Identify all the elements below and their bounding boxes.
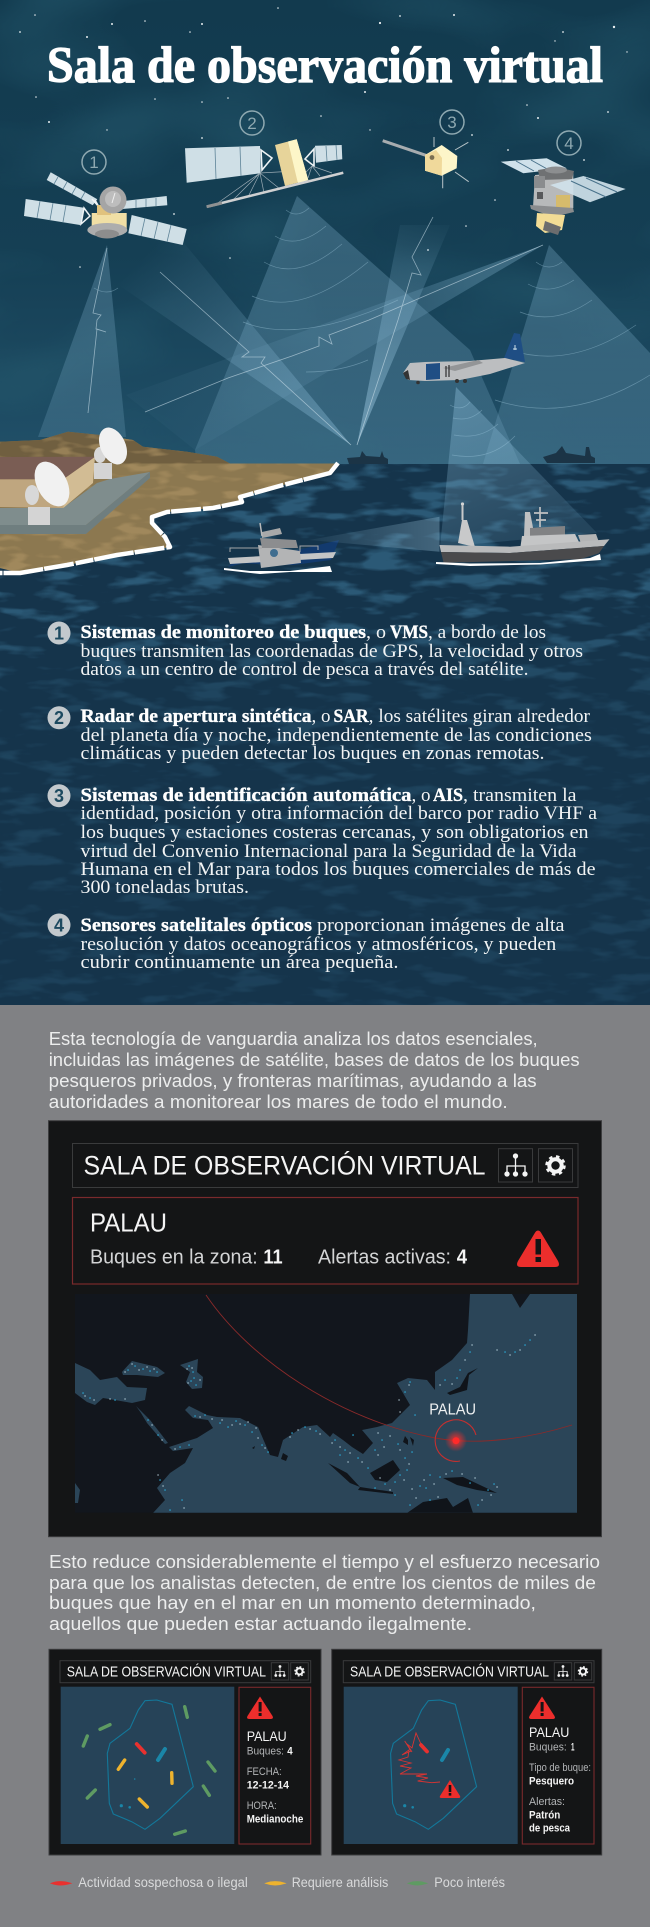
beam: satellite 1 to dish (38, 245, 126, 437)
land (0, 430, 340, 575)
intro paragraph: incluidas las imágenes de satélite, bases de datos de los buques (49, 1049, 580, 1070)
item 3: AIS: virtud del Convenio Internacional para la Seguridad de la Vida (80, 841, 577, 862)
item 1: VMS: VMS (390, 622, 428, 643)
suspicious vessel (421, 1745, 427, 1752)
second paragraph (49, 1551, 600, 1634)
signal beams (38, 196, 650, 464)
item 2: SAR: Radar de apertura sintética (80, 706, 312, 727)
item 4: optical sensors: resolución y datos oceanográficos y atmosféricos, y pueden (80, 934, 557, 955)
small title bar: SALA DE OBSERVACIÓN VIRTUAL (67, 1664, 266, 1681)
item 1: VMS: , o (366, 622, 386, 643)
item 2: SAR: SAR (334, 706, 369, 727)
item 3: AIS: identidad, posición y otra información del barco por radio VHF a (80, 803, 598, 824)
small title bar: SALA DE OBSERVACIÓN VIRTUAL (350, 1664, 549, 1681)
side info box: FECHA: (247, 1766, 282, 1778)
item 1: VMS (48, 622, 583, 680)
satellite 4 (501, 158, 626, 235)
Palau summary box: Alertas activas: (318, 1246, 451, 1268)
icon: warning triangle (517, 1230, 559, 1267)
vessel dots (83, 1340, 530, 1510)
item 2: SAR: climáticas y pueden detectar los buques en zonas remotas. (80, 743, 544, 764)
Palau marker (435, 1420, 476, 1461)
stars (19, 7, 628, 268)
fishing vessel (436, 502, 610, 566)
dashboard title bar: SALA DE OBSERVACIÓN VIRTUAL (84, 1149, 486, 1180)
side info box: PALAU (529, 1724, 569, 1740)
item 4: optical sensors (48, 914, 565, 973)
beam: satellite 2 (195, 196, 520, 464)
side info box: PALAU (247, 1728, 287, 1744)
number badges: 2 (247, 114, 257, 133)
ground station (0, 423, 150, 534)
icon: gear (546, 1156, 564, 1174)
item 1: VMS: 1 (54, 624, 64, 644)
dish front (27, 456, 77, 512)
second paragraph: Esto reduce considerablemente el tiempo y el esfuerzo necesario (49, 1551, 600, 1572)
patrol boat (224, 523, 339, 574)
satellite 2 (185, 139, 343, 207)
surveillance beam boat to ship (309, 517, 440, 552)
side info box: Tipo de buque: (529, 1762, 591, 1774)
untracked vessel (158, 1749, 165, 1760)
second paragraph: para que los analistas detecten, de entre los cientos de miles de (49, 1572, 596, 1593)
intro paragraph (49, 1028, 580, 1112)
aircraft (403, 333, 525, 384)
item 3: AIS: 3 (54, 786, 64, 806)
shoreline foam (0, 463, 338, 573)
Palau summary box: 4 (457, 1246, 468, 1268)
item 4: optical sensors: 4 (54, 916, 64, 936)
item 3: AIS: , o (412, 785, 430, 806)
legend item: low interest: Poco interés (434, 1875, 505, 1890)
legend (51, 1875, 505, 1890)
small title bar (60, 1661, 311, 1683)
item 4: optical sensors: proporcionan imágenes de alta (317, 915, 565, 936)
signal bolts (88, 217, 543, 445)
item 3: AIS: AIS (433, 785, 463, 806)
sea panel (0, 464, 650, 1005)
item 2: SAR (48, 706, 592, 764)
Palau summary box: PALAU (90, 1210, 167, 1238)
title: Sala de observación virtual (47, 38, 603, 94)
side info box: Buques: (529, 1742, 567, 1754)
item 3: AIS: Sistemas de identificación automática (80, 785, 412, 806)
number badges: 4 (564, 134, 574, 153)
intro paragraph: Esta tecnología de vanguardia analiza los datos esenciales, (49, 1028, 538, 1049)
Palau tracking arc (206, 1295, 572, 1441)
side info box: de pesca (529, 1823, 571, 1835)
beam: satellite 4 to station (198, 246, 542, 406)
analysis vessels (118, 1760, 172, 1807)
panel: fishing alert (332, 1649, 602, 1855)
item 1: VMS: Sistemas de monitoreo de buques (80, 622, 366, 643)
item 4: optical sensors: cubrir continuamente un área pequeña. (80, 952, 398, 973)
dish rear (93, 423, 133, 469)
number badges: 3 (447, 113, 457, 132)
number badges: 1 (89, 153, 99, 172)
intro paragraph: autoridades a monitorear los mares de todo el mundo. (49, 1091, 508, 1112)
item 3: AIS: los buques y estaciones costeras cercanas, y son obligatorios en (80, 822, 589, 843)
fishing track (399, 1733, 440, 1783)
legend item: suspicious: Actividad sospechosa o ilegal (78, 1875, 248, 1890)
beam: satellite 4 (483, 245, 650, 464)
small map with fishing track (344, 1687, 518, 1844)
side info box: Buques: (247, 1745, 284, 1757)
map label: PALAU (429, 1401, 476, 1418)
distant ship silhouettes (347, 446, 595, 464)
numbered systems list (48, 622, 598, 973)
side info box: Pesquero (529, 1775, 574, 1787)
item 3: AIS: 300 toneladas brutas. (80, 877, 249, 898)
low interest vessels (83, 1707, 215, 1834)
panel: vessel overview (49, 1649, 321, 1855)
side info box: Medianoche (247, 1814, 303, 1826)
number badges (82, 110, 581, 174)
second paragraph: aquellos que pueden estar actuando ilegalmente. (49, 1613, 472, 1634)
icon: map alert (440, 1780, 460, 1798)
small map with zone (61, 1687, 234, 1844)
night sky panel (0, 0, 650, 464)
side info box: 1 (571, 1742, 574, 1754)
item 3: AIS: Humana en el Mar para todos los buques comerciales de más de (80, 859, 596, 880)
item 1: VMS: datos a un centro de control de pesca a través del satélite. (80, 659, 528, 680)
side info box (239, 1687, 311, 1844)
Palau summary box (72, 1198, 578, 1284)
Palau summary box: Buques en la zona: (90, 1246, 258, 1268)
dashboard title bar (72, 1144, 578, 1188)
untracked vessel (442, 1750, 448, 1760)
satellite 3 (383, 137, 469, 188)
side info box: 12-12-14 (247, 1780, 290, 1792)
item 3: AIS (48, 784, 598, 898)
icon: hierarchy (505, 1154, 527, 1176)
legend item: analysis: Requiere análisis (292, 1875, 389, 1890)
ocean shapes (153, 1294, 577, 1513)
item 2: SAR: , o (312, 706, 330, 727)
item 3: AIS: , transmiten la (463, 785, 577, 806)
signal ripples (94, 208, 650, 456)
item 1: VMS: , a bordo de los (428, 622, 546, 643)
second paragraph: buques que hay en el mar en un momento determinado, (49, 1592, 536, 1613)
side info box (522, 1687, 594, 1844)
world map with vessel density (75, 1294, 577, 1513)
suspicious vessel (137, 1744, 145, 1753)
item 2: SAR: , los satélites giran alrededor (369, 706, 591, 727)
item 1: VMS: buques transmiten las coordenadas de GPS, la velocidad y otros (80, 641, 583, 662)
Palau summary box: 11 (263, 1246, 283, 1268)
side info box: Alertas: (529, 1796, 565, 1808)
Mediterranean, Black Sea, Caspian, Red Sea (75, 1359, 203, 1503)
aircraft surveillance beam (440, 387, 597, 547)
intro paragraph: pesqueros privados, y fronteras marítimas, ayudando a las (49, 1070, 537, 1091)
main dashboard panel (48, 1121, 602, 1537)
item 2: SAR: del planeta día y noche, independientemente de las condiciones (80, 725, 592, 746)
side info box: 4 (287, 1745, 293, 1757)
satellite 1 (24, 172, 187, 245)
beam: satellite 3 to ship (357, 225, 450, 445)
side info box: HORA: (247, 1800, 277, 1812)
small title bar (343, 1661, 594, 1683)
beam: satellite 1 to ship (148, 256, 350, 444)
dark islands (252, 1368, 497, 1513)
item 2: SAR: 2 (54, 708, 64, 728)
side info box: Patrón (529, 1809, 561, 1821)
item 4: optical sensors: Sensores satelitales ópticos (80, 915, 312, 936)
